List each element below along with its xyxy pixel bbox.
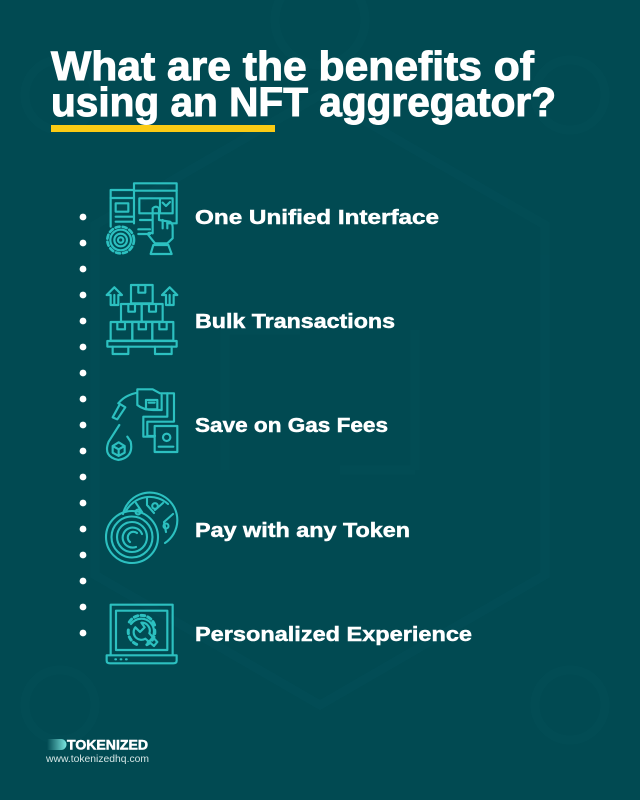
icon: laptop with gear and wrench — [107, 605, 177, 663]
label: Personalized Experience: Personalized Experience — [195, 623, 472, 646]
title underline — [51, 125, 275, 132]
label: Save on Gas Fees: Save on Gas Fees — [195, 414, 388, 437]
title — [51, 43, 556, 125]
website url: www.tokenizedhq.com — [45, 753, 149, 765]
icon: stacked boxes on pallet — [107, 285, 177, 354]
icon: token coins — [106, 493, 177, 563]
dotted vertical timeline — [80, 214, 86, 636]
logo: Tokenized brand mark and wordmark: TOKENIZED — [67, 738, 148, 752]
title: using an NFT aggregator? — [51, 79, 556, 125]
label: One Unified Interface: One Unified Interface — [195, 206, 439, 229]
icon: gas pump nozzle with drop — [107, 389, 177, 460]
icon: interface windows with gear and hand — [107, 183, 177, 254]
label: Bulk Transactions: Bulk Transactions — [195, 310, 395, 333]
title: What are the benefits of — [51, 43, 535, 89]
label: Pay with any Token: Pay with any Token — [195, 519, 410, 542]
